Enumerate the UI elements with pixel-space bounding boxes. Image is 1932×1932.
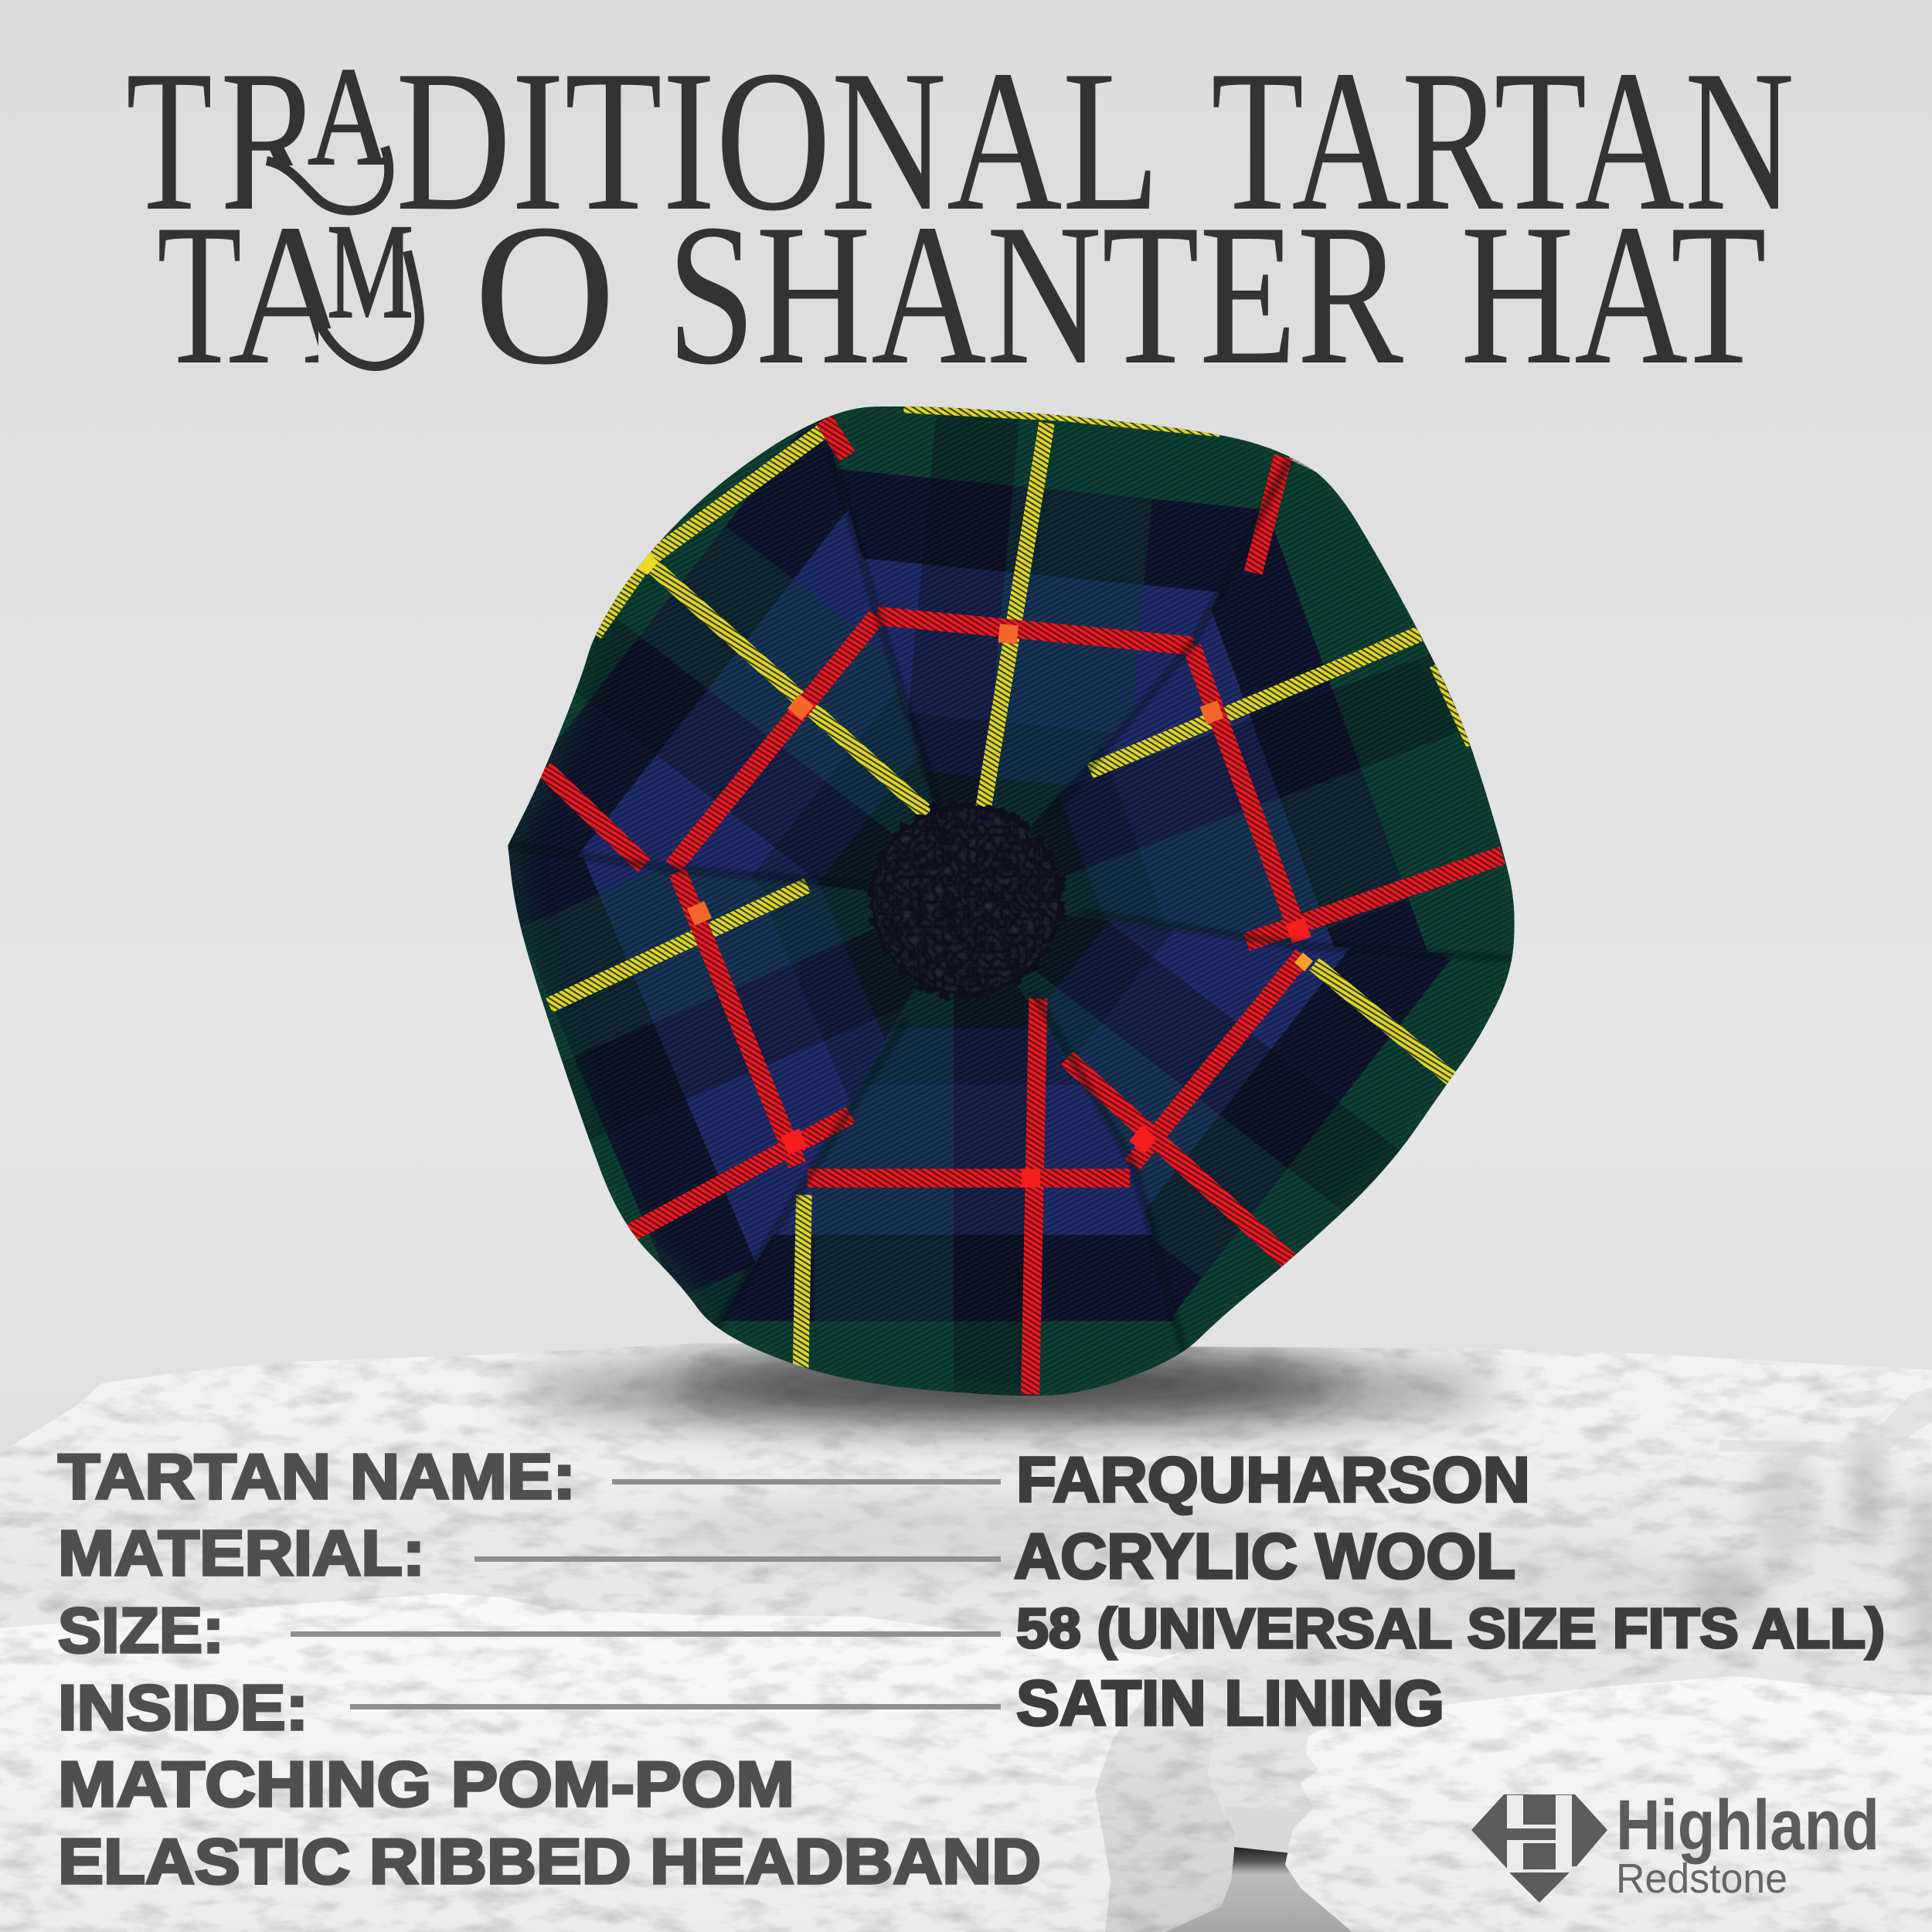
logo word: Highland: Highland — [1616, 1786, 1879, 1865]
tartan panels — [508, 406, 1515, 1396]
title line 2: SHANTER — [667, 182, 1404, 406]
row: tartan name: TARTAN NAME: — [58, 1440, 576, 1512]
row: material — [58, 1517, 1515, 1592]
row: tartan name: FARQUHARSON — [1016, 1444, 1530, 1515]
feature: elastic ribbed headband: ELASTIC RIBBED HEADBAND — [58, 1825, 1041, 1897]
yellow stripes — [549, 408, 1469, 1372]
hat shadow — [510, 1357, 1499, 1423]
row: material: ACRYLIC WOOL — [1014, 1520, 1515, 1592]
row: size: SIZE: — [58, 1594, 224, 1666]
row: material: MATERIAL: — [58, 1517, 425, 1589]
pom-pom — [869, 803, 1063, 997]
spec rows: left labels and values — [58, 1440, 1885, 1897]
row: inside: INSIDE: — [58, 1672, 308, 1743]
hat — [508, 406, 1515, 1396]
title line 1: R — [220, 29, 323, 253]
title — [128, 70, 1791, 371]
row: size: 58 (UNIVERSAL SIZE FITS ALL) — [1016, 1598, 1885, 1660]
stripe crossings — [634, 550, 1313, 1188]
ground gap between rocks — [1151, 1843, 1376, 1932]
panel seams — [508, 450, 1512, 1361]
title line 1: A — [308, 38, 391, 195]
title line 2: O — [474, 182, 616, 406]
rock: main slab — [0, 1343, 1932, 1932]
title line 2: T — [157, 182, 242, 406]
logo: Highland Redstone — [1471, 1786, 1879, 1903]
feature: matching pom-pom: MATCHING POM-POM — [58, 1748, 794, 1820]
rock: slab shading — [641, 1387, 1932, 1669]
rock: lower-left block — [0, 1594, 1234, 1932]
title line 2: A — [228, 182, 355, 406]
row: inside: SATIN LINING — [1016, 1667, 1444, 1739]
logo word: Redstone: Redstone — [1616, 1855, 1787, 1902]
title line 1 — [128, 70, 1791, 216]
title line 2 — [159, 227, 1764, 371]
rock: lower-left side face — [1095, 1651, 1234, 1932]
title line 1: DITIONAL — [396, 29, 1160, 253]
title line 1: T — [126, 29, 213, 253]
row: inside — [58, 1667, 1444, 1743]
row: size — [58, 1594, 1885, 1666]
red stripes — [545, 420, 1502, 1394]
row: tartan name — [58, 1440, 1530, 1515]
icon: diamond H mark — [1471, 1794, 1607, 1903]
title line 2: M — [327, 196, 413, 347]
rock: lower-right block — [1285, 1676, 1932, 1932]
title line 2: HAT — [1461, 182, 1767, 406]
slab underside — [1223, 1806, 1308, 1853]
